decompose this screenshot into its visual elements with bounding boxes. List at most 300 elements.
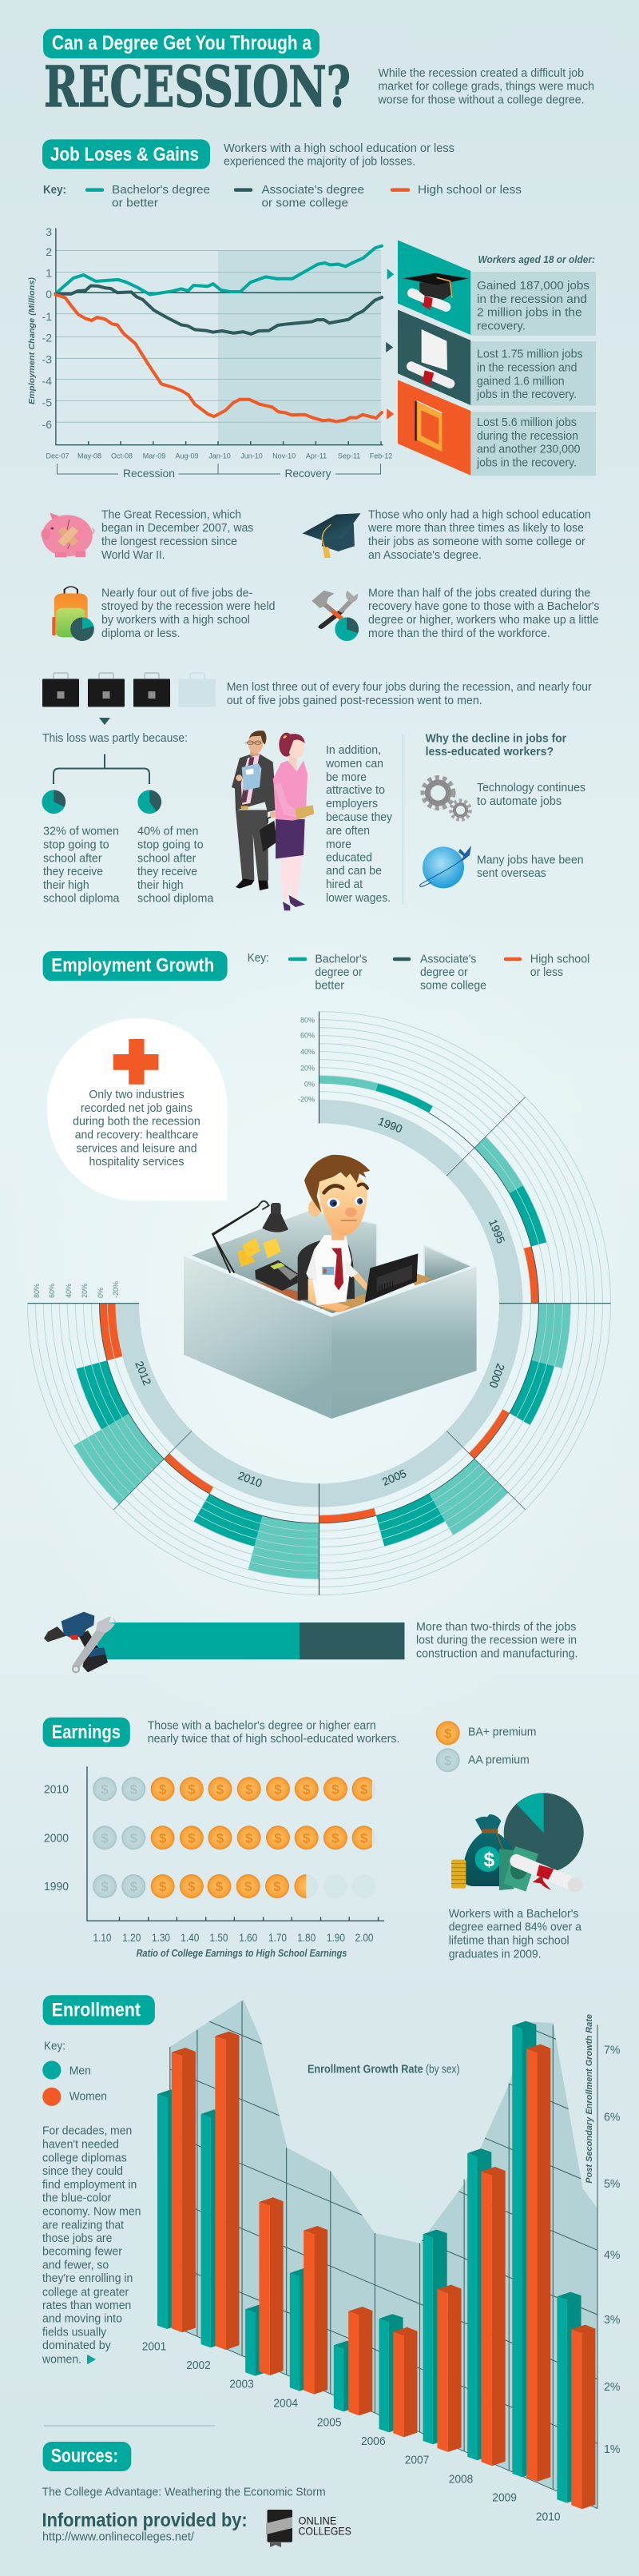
bars 2007 <box>423 2230 462 2452</box>
percent axis labels: 6% <box>604 2110 620 2124</box>
row: 2000 coins: $ <box>101 1830 109 1845</box>
sticky notes <box>237 1237 281 1267</box>
recession and recovery brackets: Recession <box>123 467 175 480</box>
reason heading: This loss was partly because: <box>42 731 188 745</box>
year labels: 2006 <box>361 2435 386 2448</box>
fact: tools <box>312 587 599 641</box>
grid lines <box>170 2021 597 2444</box>
pie: lifetime earnings premium <box>504 1793 584 1873</box>
sources pill: Sources: <box>51 2446 118 2467</box>
icon: hammer and wrench <box>312 591 358 627</box>
icon: money bag, bills and diploma <box>451 1814 582 1893</box>
illustration: worker in cubicle <box>184 1155 477 1419</box>
enrollment paragraph: college diplomas <box>42 2151 127 2164</box>
fact: graduation cap: their jobs as someone with some college or <box>368 535 585 548</box>
intro text: While the recession created a difficult job <box>379 66 584 80</box>
section intro: Workers with a high school education or less <box>224 141 454 155</box>
axis title: Ratio of College Earnings to High School Earnings <box>137 1947 347 1959</box>
axes <box>87 1766 384 1921</box>
percent axis labels: 1% <box>604 2443 620 2456</box>
men lost jobs text: out of five jobs gained post-recession went to men. <box>227 694 482 707</box>
section intro: nearly twice that of high school-educated workers. <box>148 1732 399 1746</box>
x axis month labels <box>46 452 392 460</box>
year labels: 2000 <box>486 1362 507 1390</box>
illustration: man and woman <box>232 731 314 910</box>
office chair <box>298 1240 355 1300</box>
ratio tick labels: 1.60 <box>239 1931 257 1944</box>
row: 2000 coins: $ <box>360 1830 368 1845</box>
arrows to result panels <box>386 269 394 420</box>
fact: backpack: by workers with a high school <box>101 613 250 627</box>
associate's line <box>55 285 382 334</box>
fact: graduation cap: were more than three times as likely to lose <box>367 521 584 535</box>
left axis percent labels: 60% <box>48 1284 56 1298</box>
top axis percent labels <box>298 1016 315 1103</box>
year labels: 2010 <box>44 1782 69 1796</box>
bars 2008 <box>467 2148 506 2466</box>
fact: piggy bank: World War II. <box>101 548 165 562</box>
intro text <box>378 66 594 106</box>
y axis title: Employment Change (Millions) <box>28 277 37 404</box>
chart backdrop <box>170 2000 597 2509</box>
recovery shading and grid <box>55 228 383 445</box>
computer monitor <box>365 1253 418 1303</box>
men stat text: school diploma <box>137 892 214 906</box>
x axis month labels: Sep-11 <box>338 452 360 460</box>
enrollment paragraph: dominated by <box>42 2339 111 2352</box>
panel: associate's result: Lost 1.75 million jobs <box>477 348 583 361</box>
year labels: 2005 <box>380 1467 408 1488</box>
men stat text: 40% of men <box>137 825 198 838</box>
y axis labels: -1 <box>42 310 52 323</box>
row: 2000 coins <box>93 1825 376 1849</box>
chart key: Key: <box>43 183 66 197</box>
fact: piggy bank: the longest recession since <box>101 535 237 548</box>
key: some college <box>420 979 486 993</box>
row: 2000 coins: $ <box>130 1830 138 1845</box>
section heading pill <box>42 139 210 169</box>
key: Associate's <box>420 952 476 966</box>
key: better <box>315 979 344 993</box>
section: job losses and gains <box>28 139 596 480</box>
construction text <box>416 1620 578 1660</box>
key: Women <box>69 2090 107 2104</box>
enrollment paragraph: since they could <box>42 2164 123 2178</box>
row: 1990 coins <box>93 1874 307 1898</box>
women paragraph: lower wages. <box>326 891 391 905</box>
bars 2006 <box>379 2314 417 2437</box>
back walls <box>192 1211 470 1313</box>
enrollment paragraph: find employment in <box>42 2178 137 2192</box>
x axis month labels: Apr-11 <box>306 452 327 460</box>
fact: backpack: diploma or less. <box>101 627 181 640</box>
bachelor's lifetime earnings text: degree earned 84% over a <box>449 1921 582 1934</box>
percent axis title: Post Secondary Enrollment Growth Rate <box>585 2014 594 2184</box>
fact: graduation cap: an Associate's degree. <box>368 548 482 562</box>
section intro: experienced the majority of job losses. <box>224 154 415 168</box>
chart title: Enrollment Growth Rate <box>308 2062 423 2076</box>
enrollment paragraph: those jobs are <box>42 2232 112 2245</box>
section heading pill <box>43 951 228 981</box>
enrollment paragraph: fields usually <box>42 2325 107 2339</box>
percent axis labels: 7% <box>604 2043 620 2056</box>
percent axis labels: 3% <box>604 2313 620 2327</box>
callout text: services and leisure and <box>77 1141 196 1155</box>
year labels: 1990 <box>44 1880 69 1893</box>
facts grid <box>42 508 599 641</box>
radial chart: employment growth by year <box>27 1012 610 1595</box>
x axis month labels: May-08 <box>77 452 101 460</box>
x axis month labels: Jan-10 <box>208 452 231 460</box>
overseas text: Many jobs have been <box>477 854 584 867</box>
row: 2000 coins: $ <box>245 1830 253 1845</box>
key: High school <box>530 952 589 966</box>
left axis percent labels: 20% <box>81 1284 89 1298</box>
row: 2010 coins <box>93 1777 376 1801</box>
arrow: to chart <box>87 2355 96 2364</box>
legend: $ <box>444 1726 452 1741</box>
enrollment paragraph: rates than women <box>42 2299 131 2312</box>
provider url: http://www.onlinecolleges.net/ <box>42 2530 195 2543</box>
y axis labels: -3 <box>42 353 52 366</box>
ratio tick labels: 1.90 <box>327 1931 345 1944</box>
women paragraph: hired at <box>326 878 363 891</box>
y axis labels: -5 <box>42 396 52 409</box>
panel: associate's result: gained 1.6 million <box>477 375 565 388</box>
section intro <box>224 141 454 168</box>
source text: The College Advantage: Weathering the Economic Storm <box>42 2485 326 2498</box>
fact: backpack: Nearly four out of five jobs de- <box>101 587 252 599</box>
fact: backpack <box>52 587 275 641</box>
top axis percent labels: 0% <box>304 1080 315 1088</box>
row: 2010 coins: $ <box>303 1782 311 1797</box>
key: Men <box>69 2064 91 2078</box>
legend <box>436 1721 536 1772</box>
pie: 40 percent of men <box>137 790 161 814</box>
top axis percent labels: 40% <box>300 1048 315 1056</box>
enrollment paragraph: becoming fewer <box>42 2245 122 2259</box>
enrollment paragraph: women. <box>42 2353 81 2367</box>
bars 2005 <box>334 2307 372 2415</box>
bachelor's line <box>55 246 382 295</box>
ratio tick labels: 1.40 <box>181 1931 199 1944</box>
left axis percent labels: 0% <box>97 1288 105 1298</box>
year labels <box>142 2340 560 2524</box>
men lost jobs text: Men lost three out of every four jobs during the recession, and nearly four <box>227 680 592 694</box>
men stat text: stop going to <box>137 838 204 852</box>
top axis percent labels: 60% <box>300 1031 315 1039</box>
desk lamp <box>212 1201 288 1273</box>
women paragraph: and can be <box>326 864 382 878</box>
women paragraph: more <box>326 838 351 851</box>
row: 1990 coins: $ <box>188 1879 196 1894</box>
row: 2000 coins: $ <box>159 1830 167 1845</box>
men stat text <box>137 825 214 906</box>
year labels: 2009 <box>492 2491 517 2505</box>
x axis month labels: Oct-08 <box>111 452 133 460</box>
section: enrollment <box>42 1995 620 2521</box>
enrollment paragraph: college at greater <box>42 2285 129 2299</box>
row: 2010 coins: $ <box>188 1782 196 1797</box>
bar: construction and manufacturing share <box>97 1622 404 1659</box>
fact: tools: recovery have gone to those with a Bachelor's <box>368 599 599 613</box>
bachelor's lifetime earnings text: graduates in 2009. <box>449 1947 542 1961</box>
enrollment paragraph: the blue-color <box>42 2192 111 2205</box>
key: or less <box>530 966 563 979</box>
ratio tick labels: 1.20 <box>122 1931 141 1944</box>
row: 2010 coins: $ <box>360 1782 368 1797</box>
icon: book <box>415 401 442 452</box>
bachelor's lifetime earnings text: lifetime than high school <box>449 1934 570 1948</box>
chart key: or better <box>112 197 158 210</box>
row: 2010 coins: $ <box>130 1782 138 1797</box>
panel: high school result: jobs in the recovery. <box>476 456 577 470</box>
top axis percent labels: -20% <box>298 1095 315 1103</box>
fact: piggy bank <box>42 508 253 562</box>
section heading pill <box>43 1718 130 1747</box>
percentage rings <box>27 1012 610 1595</box>
recession and recovery brackets <box>58 464 380 480</box>
women stat text: their high <box>43 878 89 892</box>
y axis labels: 3 <box>46 225 52 238</box>
top axis percent labels: 80% <box>300 1016 315 1024</box>
men stat text: they receive <box>137 865 197 878</box>
year labels: 2004 <box>273 2397 298 2411</box>
bars 2003 <box>245 2197 284 2376</box>
icon: graduation cap <box>303 513 361 558</box>
ratio tick labels: 1.80 <box>297 1931 316 1944</box>
workers heading: Workers aged 18 or older: <box>478 253 595 265</box>
bars 2001 <box>157 2048 196 2332</box>
callout text: and recovery: healthcare <box>75 1128 198 1141</box>
telephone <box>255 1260 298 1291</box>
panel: bachelor's result: Gained 187,000 jobs <box>477 279 589 293</box>
key: Key: <box>248 951 269 965</box>
fact: piggy bank: The Great Recession, which <box>101 508 241 521</box>
bills <box>499 1846 538 1892</box>
enrollment paragraph <box>42 2124 141 2367</box>
section: employment growth <box>27 951 610 1672</box>
3d bar chart: enrollment growth <box>157 2000 597 2510</box>
overseas text <box>477 854 584 880</box>
y axis labels: -6 <box>42 418 52 431</box>
chart key: High school or less <box>418 183 522 197</box>
percent axis labels <box>604 2043 620 2456</box>
chart key: Associate's degree <box>262 183 364 197</box>
section heading pill: Enrollment <box>52 1999 141 2021</box>
panel: men and women <box>42 673 592 910</box>
fact: graduation cap: Those who only had a high school education <box>368 508 591 521</box>
year labels: 2002 <box>186 2359 211 2372</box>
enrollment paragraph: and fewer, so <box>42 2258 109 2271</box>
row: 2000 coins: $ <box>216 1830 224 1845</box>
year band <box>127 1111 511 1495</box>
connector tree <box>54 754 149 784</box>
construction text: More than two-thirds of the jobs <box>416 1620 576 1634</box>
overseas text: sent overseas <box>477 866 546 880</box>
main title word: RECESSION? <box>44 54 351 120</box>
section heading pill: Earnings <box>52 1722 121 1743</box>
legend: AA premium <box>468 1754 530 1767</box>
divider <box>403 734 404 905</box>
decline heading: Why the decline in jobs for <box>426 732 566 745</box>
women paragraph: employers <box>326 797 378 810</box>
x axis month labels: Nov-10 <box>272 452 296 460</box>
year labels: 2010 <box>236 1469 264 1490</box>
fact: tools: more than the third of the workforce. <box>368 627 550 640</box>
ratio tick labels: 1.10 <box>93 1931 112 1944</box>
key: degree or <box>420 966 468 979</box>
x axis month labels: Jun-10 <box>240 452 263 460</box>
year labels: 2007 <box>405 2453 429 2467</box>
logo: online colleges <box>266 2510 351 2547</box>
women paragraph: are often <box>326 824 370 838</box>
y axis labels: 0 <box>46 288 52 301</box>
high school line <box>55 295 382 421</box>
man <box>232 731 277 890</box>
icon: drill and wrench <box>44 1612 116 1672</box>
left axis percent labels <box>33 1281 120 1298</box>
y axis labels: -2 <box>42 331 52 344</box>
women paragraph <box>325 743 392 905</box>
left axis percent labels: -20% <box>112 1281 120 1298</box>
year labels: 2003 <box>229 2378 254 2391</box>
panel: bachelor's result <box>398 240 596 336</box>
women paragraph: because they <box>326 810 392 824</box>
left axis percent labels: 80% <box>33 1284 41 1298</box>
fact: piggy bank: began in December 2007, was <box>101 521 253 535</box>
callout text: hospitality services <box>89 1155 184 1169</box>
pie: backpack share <box>70 617 94 641</box>
icon: gears <box>423 778 470 819</box>
y axis labels: -4 <box>42 374 52 387</box>
callout text <box>73 1088 200 1169</box>
fact: tools: More than half of the jobs created during the <box>368 587 590 599</box>
title pill <box>43 29 320 58</box>
title block <box>43 29 594 120</box>
icon: piggy bank <box>42 512 94 557</box>
panel: bachelor's result: in the recession and <box>477 293 587 306</box>
chart key: or some college <box>262 197 348 210</box>
top axis percent labels: 20% <box>300 1064 315 1072</box>
teal bars <box>83 1068 554 1539</box>
year labels: 2012 <box>133 1359 154 1388</box>
y axis labels: 2 <box>46 245 52 258</box>
row: 2010 coins: $ <box>245 1782 253 1797</box>
panel: bachelor's result: recovery. <box>477 319 526 332</box>
decline heading <box>426 732 566 758</box>
year labels: 2008 <box>449 2472 473 2486</box>
provider heading: Information provided by: <box>42 2510 248 2531</box>
logo: online colleges: COLLEGES <box>299 2525 351 2538</box>
sources pill <box>43 2442 131 2471</box>
women stat text: 32% of women <box>43 825 119 838</box>
orange bars <box>104 1088 535 1519</box>
legend: BA+ premium <box>468 1726 536 1739</box>
key: degree or <box>315 966 363 979</box>
section heading pill: Job Loses & Gains <box>50 144 199 165</box>
icon: graduation cap and diploma <box>403 273 469 310</box>
row: 2000 coins: $ <box>331 1830 339 1845</box>
icon: medical cross <box>113 1039 158 1085</box>
women paragraph: In addition, <box>326 743 381 757</box>
year labels: 1995 <box>486 1217 508 1245</box>
ratio tick labels <box>93 1931 374 1944</box>
enrollment paragraph: haven't needed <box>42 2137 119 2151</box>
title pill: Can a Degree Get You Through a <box>52 32 312 54</box>
legend: $ <box>444 1753 452 1768</box>
men stat text: school after <box>137 851 196 865</box>
enrollment paragraph: For decades, men <box>42 2124 132 2138</box>
x axis month labels: Mar-09 <box>143 452 165 460</box>
row: 1990 coins: $ <box>216 1879 224 1894</box>
woman <box>273 733 314 910</box>
chart title: (by sex) <box>426 2062 460 2076</box>
ratio tick labels: 1.50 <box>209 1931 228 1944</box>
section intro <box>148 1718 399 1746</box>
desk <box>254 1273 433 1313</box>
panel: high school result: during the recession <box>477 429 578 443</box>
women paragraph: be more <box>326 770 367 784</box>
row: 1990 coins: $ <box>101 1879 109 1894</box>
row: 2000 coins: $ <box>274 1830 282 1845</box>
panel: bachelor's result: 2 million jobs in the <box>477 305 582 319</box>
panel: high school result <box>398 380 596 476</box>
construction text: construction and manufacturing. <box>416 1646 578 1660</box>
women stat text <box>43 825 120 906</box>
row: 1990 coins: $ <box>273 1879 281 1894</box>
panel: high school result: Lost 5.6 million jobs <box>477 416 577 429</box>
coin chart <box>44 1766 384 1959</box>
panel: associate's result: jobs in the recovery. <box>476 388 577 401</box>
row: 1990 coins: $ <box>244 1879 252 1894</box>
callout text: Only two industries <box>89 1088 185 1101</box>
enrollment paragraph: are realizing that <box>42 2218 125 2232</box>
year labels: 2001 <box>142 2340 166 2354</box>
key: Key: <box>44 2039 65 2052</box>
row: 1990 coins: $ <box>159 1879 167 1894</box>
chart key <box>43 183 522 210</box>
footer: sources and credit <box>42 2426 351 2547</box>
construction text: lost during the recession were in <box>416 1634 577 1647</box>
section heading pill <box>43 1995 155 2025</box>
percent axis labels: 5% <box>604 2177 620 2191</box>
intro text: market for college grads, things were much <box>379 80 594 94</box>
decline heading: less-educated workers? <box>426 745 554 758</box>
icon: four briefcases <box>42 673 216 707</box>
worker <box>304 1155 370 1312</box>
year labels: 2000 <box>44 1831 69 1845</box>
section: earnings <box>43 1718 584 1961</box>
women paragraph: women can <box>325 757 383 770</box>
front walls <box>184 1252 477 1419</box>
year labels <box>133 1114 508 1490</box>
women stat text: school diploma <box>43 892 120 906</box>
line chart: employment change <box>28 225 392 480</box>
bars 2004 <box>290 2226 327 2395</box>
row: 1990 coins: $ <box>130 1879 138 1894</box>
men stat text: their high <box>137 878 184 892</box>
x axis month labels: Dec-07 <box>46 452 69 460</box>
year labels <box>44 1782 69 1893</box>
bars 2009 <box>512 2021 550 2482</box>
callout: healthcare and hospitality <box>47 1018 228 1200</box>
coin stack <box>451 1860 466 1889</box>
enrollment paragraph: economy. Now men <box>42 2205 141 2219</box>
row: 2000 coins: $ <box>303 1830 311 1845</box>
year labels: 2010 <box>536 2510 561 2524</box>
enrollment paragraph: and moving into <box>42 2312 122 2326</box>
